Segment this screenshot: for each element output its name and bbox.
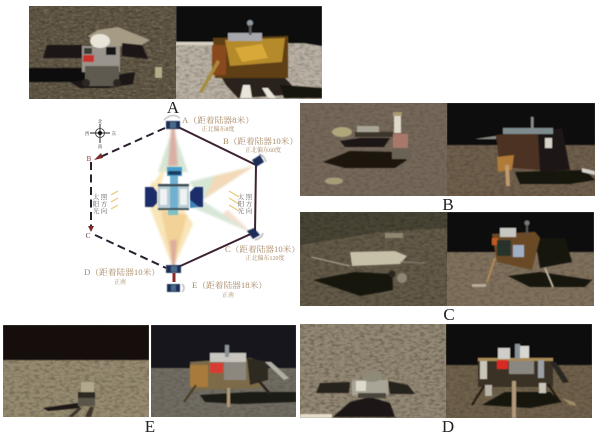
sunlight caption right	[238, 192, 253, 215]
diagram: rover circuit around lander	[84, 115, 300, 299]
rover marker: position C	[247, 228, 263, 240]
caption: position D	[84, 267, 160, 286]
rover marker: position B	[252, 154, 266, 167]
compass	[85, 118, 117, 150]
lander top view	[145, 167, 203, 215]
caption: position A	[182, 115, 254, 133]
label: left B: B	[87, 155, 92, 163]
photo pair: position C	[300, 212, 594, 306]
sunlight caption left: 向	[101, 206, 108, 215]
sunlight arrows right	[229, 191, 239, 211]
caption: position D: 正南	[114, 278, 126, 286]
caption: position B: 正北偏东60度	[245, 146, 281, 154]
caption: position E	[192, 280, 267, 299]
label: E: E	[145, 417, 155, 436]
photo: rover from position B	[300, 103, 447, 196]
photo: rover from position E	[3, 325, 149, 417]
photo: lander from position B	[447, 103, 595, 196]
photo pair: top (position A)	[29, 6, 322, 99]
compass: 北	[98, 118, 103, 125]
rover marker: position D	[166, 265, 181, 273]
photo: rover from position D	[300, 324, 446, 418]
sunlight caption right: 太	[238, 192, 245, 201]
sunlight caption left: 阳	[93, 199, 100, 208]
sunlight caption left	[93, 192, 108, 215]
photo pair: position D	[300, 324, 592, 418]
label: B: B	[442, 195, 454, 214]
sunlight caption right: 光	[238, 206, 245, 215]
caption: position C: C（距着陆器10米）	[225, 244, 300, 254]
sunlight caption right: 方	[246, 199, 253, 208]
compass: 西	[85, 130, 90, 137]
sunlight caption right: 阳	[238, 199, 245, 208]
caption: position A: A（距着陆器8米）	[182, 115, 254, 125]
route: dashed path D to A via left side	[91, 128, 166, 268]
caption: position D: D（距着陆器10米）	[84, 267, 160, 277]
photo: rover from position C	[300, 212, 447, 306]
photo: lander from position C	[447, 212, 594, 306]
sunlight caption right: 向	[246, 206, 253, 215]
photo: lander from position A	[176, 6, 322, 99]
sunlight caption left: 照	[101, 192, 108, 201]
light beams converging on the lander	[147, 128, 254, 268]
sunlight caption left: 方	[101, 199, 108, 208]
sunlight caption left: 太	[93, 192, 100, 201]
photo: lander from position D	[446, 324, 592, 418]
label: D: D	[442, 417, 454, 436]
photo: lander from position E	[151, 325, 296, 417]
rover marker: position E	[167, 284, 184, 292]
label: left C: C	[86, 232, 91, 240]
photo pair: position B	[300, 103, 595, 196]
photo: rover from position A	[29, 6, 176, 99]
photo pair: position E	[3, 325, 296, 417]
caption: position A: 正北偏东8度	[201, 125, 235, 133]
caption: position B: B（距着陆器10米）	[223, 136, 298, 146]
sunlight caption left: 光	[93, 206, 100, 215]
caption: position C: 正北偏东120度	[245, 254, 285, 262]
label: C: C	[443, 305, 455, 324]
rover marker: position A	[164, 115, 180, 129]
caption: position E: 正南	[222, 291, 234, 299]
label: A: A	[167, 98, 180, 117]
caption: position E: E（距着陆器18米）	[192, 280, 267, 290]
caption: position C	[225, 244, 300, 262]
route: solid path A to D via B and C	[176, 126, 256, 268]
link D to E	[172, 273, 176, 282]
compass: 东	[112, 130, 117, 137]
sunlight arrows left	[111, 191, 118, 209]
caption: position B	[223, 136, 298, 154]
compass: 南	[98, 143, 103, 150]
sunlight caption right: 照	[246, 192, 253, 201]
arrowheads	[88, 153, 103, 232]
